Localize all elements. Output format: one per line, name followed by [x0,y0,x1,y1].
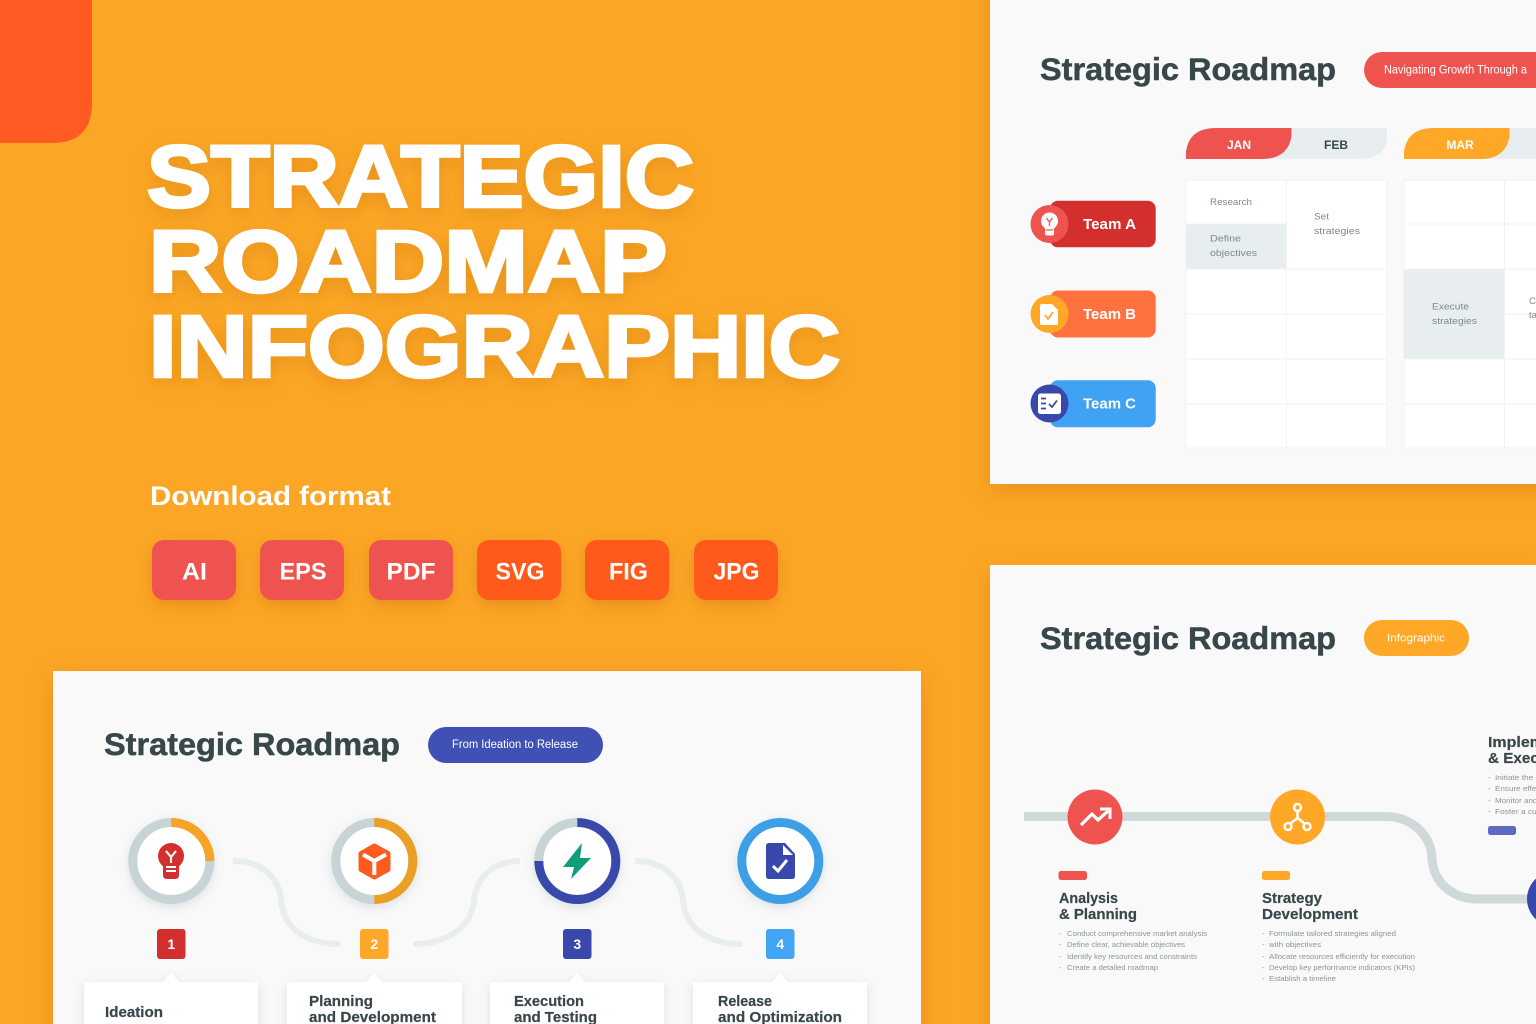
text block: analysis and planning: Define clear, achievable objectives [1067,940,1185,949]
month tabs [1186,128,1536,159]
pill: infographic [1364,620,1469,656]
text block: analysis and planning: - [1059,963,1062,972]
month tabs: FEB [1324,138,1348,152]
button: SVG: SVG [496,558,544,586]
month tabs: JAN [1227,138,1251,152]
text block: strategy development: Establish a timeline [1269,974,1336,983]
schedule grid: objectives [1210,248,1257,259]
button: EPS: EPS [280,558,326,586]
corner accent shape [0,0,92,143]
button: FIG [585,540,669,600]
milestone: implementation [1527,872,1536,926]
card 1: ideation: Ideation [105,1004,163,1021]
text block: strategy development: - [1262,940,1265,949]
text block: analysis and planning: - [1059,929,1062,938]
heading: Strategic Roadmap [1040,51,1336,87]
card 3: execution: Execution [514,993,584,1010]
schedule grid: Define [1210,234,1241,244]
button: PDF: PDF [386,558,436,586]
milestone: strategy [1270,790,1325,844]
team A: Team A [1083,216,1136,233]
month tabs: MAR [1446,138,1474,152]
main title [147,128,840,396]
panel: roadmap timeline [990,565,1536,1024]
text block: analysis and planning [1058,871,1207,972]
button: JPG [694,540,778,600]
button: AI [152,540,236,600]
card 4: release: Release [718,993,772,1010]
schedule grid: Set [1314,212,1329,222]
text block: analysis and planning: Analysis [1059,890,1118,907]
panel: ideation to release [53,671,921,1024]
schedule grid: Research [1210,197,1252,208]
button: PDF [369,540,453,600]
team C [1030,380,1156,427]
text block: implementation and execution: - [1488,796,1491,805]
schedule grid: strategies [1432,316,1477,327]
text block: strategy development: - [1262,963,1265,972]
text block: analysis and planning: Conduct comprehensive market analysis [1067,929,1207,938]
schedule grid: Execute [1432,302,1469,312]
timeline path [1024,816,1536,899]
pill: from ideation to release: From Ideation to Release [452,739,578,751]
text block: strategy development: Strategy [1262,890,1323,907]
text block: strategy development: - [1262,974,1265,983]
card 2: planning: Planning [309,993,373,1010]
button: AI: AI [182,558,207,586]
card 3: execution [490,973,664,1024]
text block: analysis and planning: Identify key resources and constraints [1067,952,1197,961]
button: EPS [260,540,344,600]
milestone: analysis [1068,790,1122,844]
step 4: 4 [776,936,784,952]
text block: strategy development: Develop key performance indicators (KPIs) [1269,963,1416,972]
text block: strategy development: Development [1262,906,1358,923]
pill: infographic: Infographic [1387,632,1446,644]
button: FIG: FIG [609,558,648,586]
button: JPG: JPG [714,558,760,586]
card 2: planning [287,973,462,1024]
heading: Strategic Roadmap [1040,620,1336,656]
schedule grid [1186,180,1536,448]
team C: Team C [1083,396,1136,412]
text block: strategy development: - [1262,952,1265,961]
team B [1030,290,1156,338]
download format heading: Download format [150,481,391,511]
text block: implementation and execution: - [1488,784,1491,793]
heading: Strategic Roadmap [104,726,400,762]
main title: INFOGRAPHIC [149,298,840,396]
text block: strategy development: with objectives [1268,940,1321,949]
step 4 [742,822,819,959]
text block: strategy development: - [1262,929,1265,938]
schedule grid: strategies [1314,226,1360,237]
text block: analysis and planning: - [1059,940,1062,949]
team B: Team B [1083,306,1136,323]
step 3 [539,822,616,959]
step 1 [133,822,210,959]
step 2 [336,822,413,959]
format buttons [152,540,778,600]
pill: subtitle [1364,52,1536,88]
text block: analysis and planning: & Planning [1059,906,1137,923]
text block: analysis and planning: Create a detailed roadmap [1067,963,1158,972]
card 4: release [693,973,867,1024]
main title: STRATEGIC [147,128,694,226]
text block: implementation and execution: - [1488,807,1491,816]
connectors [233,861,742,944]
pill: subtitle: Navigating Growth Through a [1384,64,1528,76]
text block: strategy development: Formulate tailored strategies aligned [1269,929,1396,938]
text block: strategy development: Allocate resources efficiently for execution [1269,952,1415,961]
card 1: ideation [84,973,258,1024]
step 1: 1 [167,936,175,952]
panel: team schedule [990,0,1536,484]
pill: from ideation to release [428,727,603,763]
text block: implementation and execution [1488,734,1536,835]
main title: ROADMAP [149,212,667,310]
text block: implementation and execution: - [1488,773,1491,782]
step 3: 3 [573,936,581,952]
text block: strategy development [1262,871,1416,983]
step 2: 2 [370,936,378,952]
text block: analysis and planning: - [1059,952,1062,961]
team A [1030,201,1156,247]
button: SVG [477,540,561,600]
